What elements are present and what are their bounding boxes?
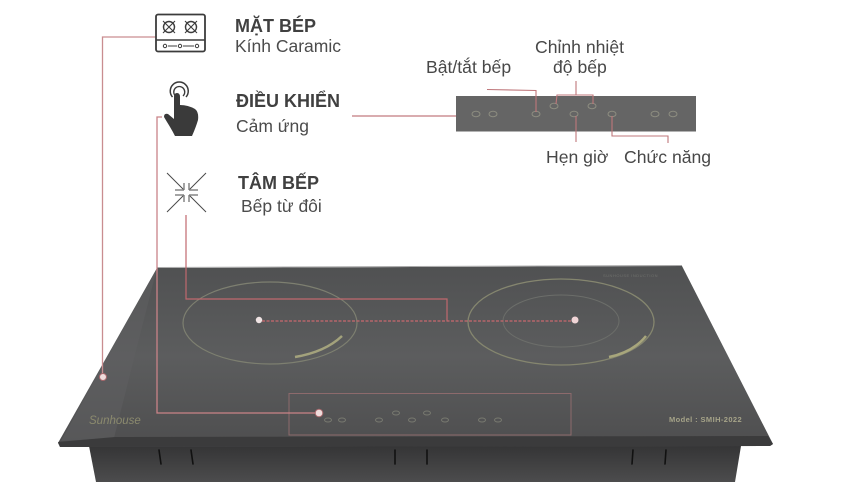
glass top edge highlight <box>157 266 682 268</box>
panel buttons <box>472 103 677 117</box>
heading: glass surface: MẶT BÉP <box>235 15 316 36</box>
underside vents <box>159 450 666 464</box>
icon: gas hob <box>156 14 205 52</box>
subheading: cooking zone: Bếp từ đôi <box>241 196 322 216</box>
marker: glass surface <box>100 374 106 380</box>
heading: cooking zone: TÂM BẾP <box>238 172 319 193</box>
connector: touch control to panel <box>352 115 456 117</box>
subheading: glass surface: Kính Caramic <box>235 36 341 56</box>
icon: touch hand <box>164 82 198 136</box>
label: on/off: Bật/tắt bếp <box>426 56 511 77</box>
cooktop underside housing <box>89 446 741 482</box>
label: functions: Chức năng <box>624 147 711 167</box>
glass left reflection <box>61 268 157 441</box>
panel leader lines <box>487 81 668 143</box>
control panel detail <box>456 81 696 143</box>
icon: cooking zone cross <box>167 173 206 212</box>
label: adjust heat: Chỉnh nhiệt <box>535 37 624 57</box>
leader line: cooking zones <box>186 215 578 324</box>
label: adjust heat <box>535 37 624 77</box>
model label: Model : SMIH-2022 <box>669 415 742 424</box>
marker: right zone centre <box>572 316 578 324</box>
heading: touch control <box>236 90 340 136</box>
label: adjust heat: độ bếp <box>553 57 607 77</box>
subheading: touch control: Cảm ứng <box>236 116 309 136</box>
heading: touch control: ĐIỀU KHIỂN <box>236 90 340 111</box>
brand logo: Sunhouse <box>89 415 141 427</box>
touch buttons on cooktop <box>324 411 502 422</box>
glass front edge <box>58 436 773 447</box>
leader line: touch control <box>157 117 323 417</box>
right cooking zone <box>468 279 654 365</box>
marker: touch control <box>315 409 323 417</box>
cooktop illustration <box>58 266 773 482</box>
cooktop rear marking: SUNHOUSE INDUCTION <box>603 273 658 278</box>
left cooking zone <box>183 282 357 364</box>
label: timer: Hẹn giờ <box>546 147 609 167</box>
heading: glass surface <box>235 15 341 56</box>
dashed line between cooking zones <box>262 320 572 322</box>
marker: left zone centre <box>256 317 262 323</box>
glass top surface <box>58 266 773 447</box>
leader line: glass surface <box>100 37 156 380</box>
control area outline <box>289 394 571 435</box>
heading: cooking zone <box>238 172 322 216</box>
